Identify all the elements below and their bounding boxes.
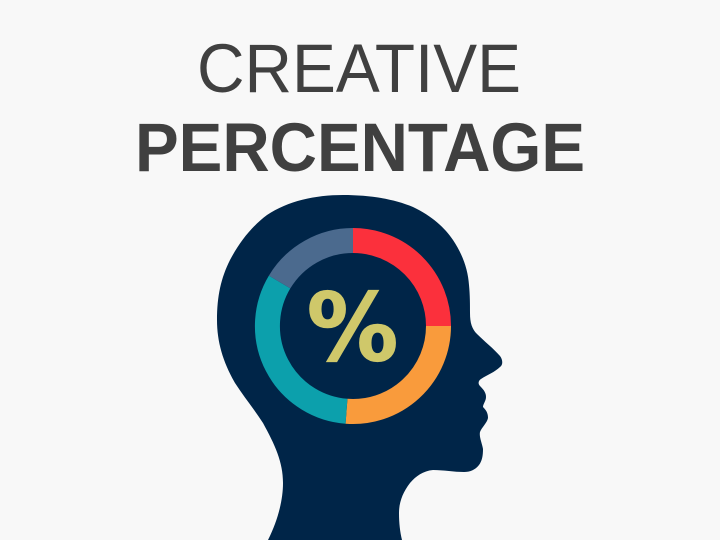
segment: orange (346, 326, 438, 411)
title line: percentage: PERCENTAGE (135, 109, 585, 186)
percent symbol: % (307, 273, 398, 382)
head silhouette (217, 195, 502, 540)
donut chart (267, 240, 438, 411)
title (135, 30, 585, 186)
segment: slate blue (280, 240, 353, 282)
title line: creative: CREATIVE (197, 30, 521, 107)
segment: red (353, 240, 438, 326)
segment: teal (267, 282, 346, 411)
